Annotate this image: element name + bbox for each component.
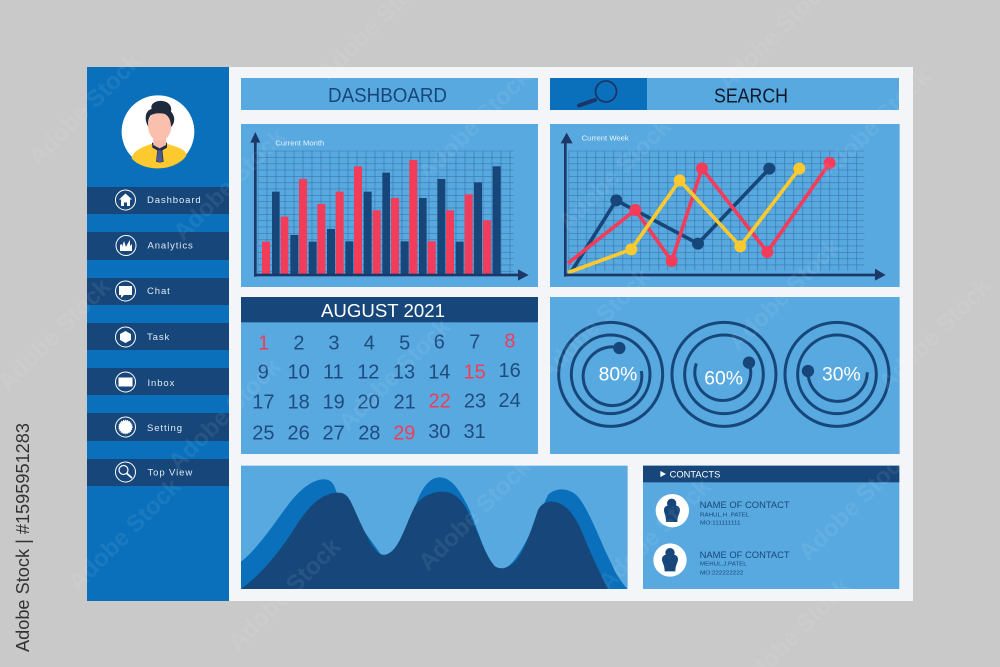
calendar days (252, 331, 521, 444)
contact 1: RAHUL.H .PATEL (700, 512, 749, 518)
watermarks: Adobe Stock (23, 48, 147, 171)
watermarks: Adobe Stock (533, 263, 657, 386)
calendar days: 19 (323, 391, 345, 413)
contact 2 (653, 543, 790, 577)
calendar days: 7 (469, 331, 480, 353)
watermarks: Adobe Stock (413, 453, 537, 576)
menu: Chat: Chat (147, 286, 171, 297)
icon: magnifier (579, 81, 616, 106)
panel: contacts (643, 466, 899, 589)
watermarks: Adobe Stock (723, 233, 847, 356)
menu: Inbox: Inbox (148, 378, 175, 389)
watermarks: Adobe Stock (873, 273, 997, 396)
line series: navy (571, 163, 775, 272)
calendar days: 21 (394, 391, 416, 413)
ring: 30% (785, 322, 889, 426)
calendar days: 2 (293, 332, 305, 354)
calendar days: 26 (288, 422, 310, 444)
calendar days: 12 (357, 361, 379, 383)
calendar days: 23 (464, 391, 486, 413)
calendar days: 5 (399, 332, 410, 354)
area: front layer (241, 492, 609, 589)
panel: monthly bar chart: Current Month (275, 138, 324, 147)
calendar days: 10 (288, 361, 310, 383)
calendar days: 1 (258, 332, 269, 354)
calendar days: 14 (428, 361, 450, 383)
contact 2: MO:222222222 (700, 570, 743, 576)
dashboard heading: DASHBOARD (328, 85, 447, 107)
watermarks: Adobe Stock (63, 473, 187, 596)
bars (262, 160, 501, 274)
panel: monthly bar chart (241, 124, 538, 287)
contact 1: MO:111111111 (700, 521, 741, 527)
calendar days: 4 (364, 332, 375, 354)
line series: red (568, 157, 836, 267)
calendar days: 17 (252, 391, 274, 413)
watermarks: Adobe Stock (793, 443, 917, 566)
calendar days: 28 (358, 422, 380, 444)
contact 1: NAME OF CONTACT (700, 500, 790, 510)
ring: 60% (672, 322, 776, 426)
panel: progress rings (550, 297, 900, 454)
menu: Task (87, 323, 229, 350)
menu: Analytics: Analytics (148, 240, 194, 252)
area: back layer (241, 477, 627, 589)
panel: calendar: AUGUST 2021 (321, 300, 445, 321)
calendar days: 18 (288, 391, 310, 413)
calendar days: 29 (393, 422, 415, 444)
calendar days: 16 (499, 360, 521, 382)
panel: area chart (241, 466, 628, 589)
ring: 60%: 60% (704, 368, 743, 389)
contact 2: MEHUL.J.PATEL (700, 562, 747, 568)
avatar (122, 95, 194, 168)
calendar days: 9 (258, 361, 269, 383)
calendar days: 8 (504, 331, 516, 353)
calendar days: 27 (323, 422, 345, 444)
sidebar (87, 67, 229, 601)
calendar days: 25 (252, 422, 274, 444)
line series: yellow (568, 163, 805, 273)
calendar days: 13 (393, 361, 415, 383)
menu: Dashboard: Dashboard (147, 195, 202, 206)
watermarks: Adobe Stock (813, 63, 937, 186)
menu: Setting: Setting (147, 423, 183, 434)
ring: 80% (559, 322, 663, 426)
calendar days: 31 (464, 421, 486, 443)
menu: Setting (87, 413, 229, 441)
search bar: SEARCH (714, 86, 788, 108)
watermarks: Adobe Stock (593, 473, 717, 596)
menu: Chat (87, 278, 229, 305)
calendar days: 22 (429, 391, 451, 413)
menu: Inbox (87, 368, 229, 395)
menu: Analytics (87, 232, 229, 260)
calendar days: 6 (434, 331, 445, 353)
watermarks: Adobe Stock (553, 113, 677, 236)
ring: 80%: 80% (599, 364, 637, 385)
watermarks: Adobe Stock (333, 313, 457, 436)
watermarks: Adobe Stock (223, 533, 347, 656)
panel: weekly line chart: Current Week (582, 134, 629, 143)
dashboard heading (241, 78, 538, 110)
panel: calendar (241, 297, 538, 454)
calendar days: 11 (323, 361, 344, 383)
calendar days: 30 (428, 421, 450, 443)
ring: 30%: 30% (822, 364, 861, 385)
axes with arrows (250, 132, 529, 281)
calendar days: 15 (464, 361, 486, 383)
axes with arrows (561, 133, 886, 281)
calendar days: 20 (358, 391, 380, 413)
panel: contacts: CONTACTS (670, 469, 720, 479)
menu: Top View (87, 459, 229, 486)
search bar (550, 78, 899, 110)
watermarks: Adobe Stock (163, 353, 287, 476)
watermarks: Adobe Stock (168, 123, 292, 246)
menu: Task: Task (147, 332, 170, 343)
contact 1 (656, 494, 790, 527)
menu: Top View: Top View (148, 468, 193, 478)
watermarks: Adobe Stock (413, 63, 537, 186)
calendar days: 24 (499, 390, 521, 412)
calendar days: 3 (328, 332, 340, 354)
contact 2: NAME OF CONTACT (700, 550, 790, 560)
vertical stock id: Adobe Stock | #1595951283 (13, 423, 33, 652)
panel: weekly line chart (550, 124, 900, 287)
menu: Dashboard (87, 187, 229, 214)
